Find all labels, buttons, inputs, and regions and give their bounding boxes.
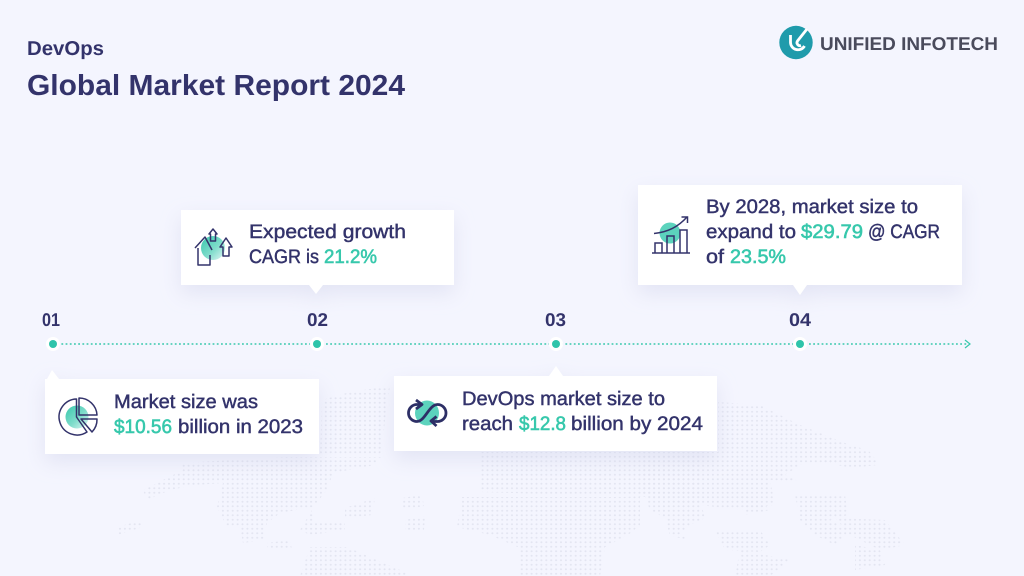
logo wordmark: UNIFIED INFOTECH [820, 33, 998, 54]
icon: growth arrows [195, 229, 232, 265]
text: $29.79 [801, 221, 863, 243]
label 01: 01 [42, 309, 60, 330]
text: Market size was [114, 391, 258, 413]
title block [27, 38, 405, 102]
text [114, 391, 303, 438]
label 04: 04 [789, 309, 812, 330]
subtitle: DevOps [27, 38, 104, 60]
logo mark [779, 26, 813, 59]
label 03: 03 [545, 309, 566, 330]
card [181, 210, 454, 294]
text: DevOps market size to [462, 388, 665, 410]
card [394, 366, 717, 451]
panel: market size 2024 [394, 366, 717, 451]
text: 23.5% [730, 246, 786, 268]
logo: Unified Infotech [779, 26, 998, 59]
node 01 [46, 337, 60, 351]
text: of [706, 246, 725, 268]
card [638, 185, 962, 295]
text: @ CAGR [868, 221, 940, 243]
text: $10.56 [114, 416, 172, 438]
text: reach [462, 413, 513, 435]
text [706, 196, 940, 268]
text: By 2028, market size to [706, 196, 918, 218]
text: 21.2% [324, 246, 377, 268]
timeline [42, 309, 970, 351]
text: $12.8 [519, 413, 566, 435]
label 02: 02 [307, 309, 328, 330]
text: CAGR is [249, 246, 319, 268]
text [462, 388, 703, 435]
text: billion in 2023 [178, 416, 303, 438]
panel: market size 2023 [45, 370, 319, 454]
arrow head [965, 340, 970, 348]
node 04 [793, 337, 807, 351]
icon: bar chart with rising arrow [652, 217, 690, 253]
panel: market size 2028 [638, 185, 962, 295]
world dot map [117, 386, 905, 576]
dotted line [53, 343, 967, 345]
icon: pie chart [59, 398, 97, 435]
panel: expected growth [181, 210, 454, 294]
icon: infinity loop arrows [408, 400, 446, 426]
node 03 [549, 337, 563, 351]
text [249, 221, 406, 268]
text: expand to [706, 221, 796, 243]
card [45, 370, 319, 454]
text: Expected growth [249, 221, 406, 243]
text: billion by 2024 [571, 413, 703, 435]
main title: Global Market Report 2024 [27, 70, 405, 102]
node 02 [310, 337, 324, 351]
